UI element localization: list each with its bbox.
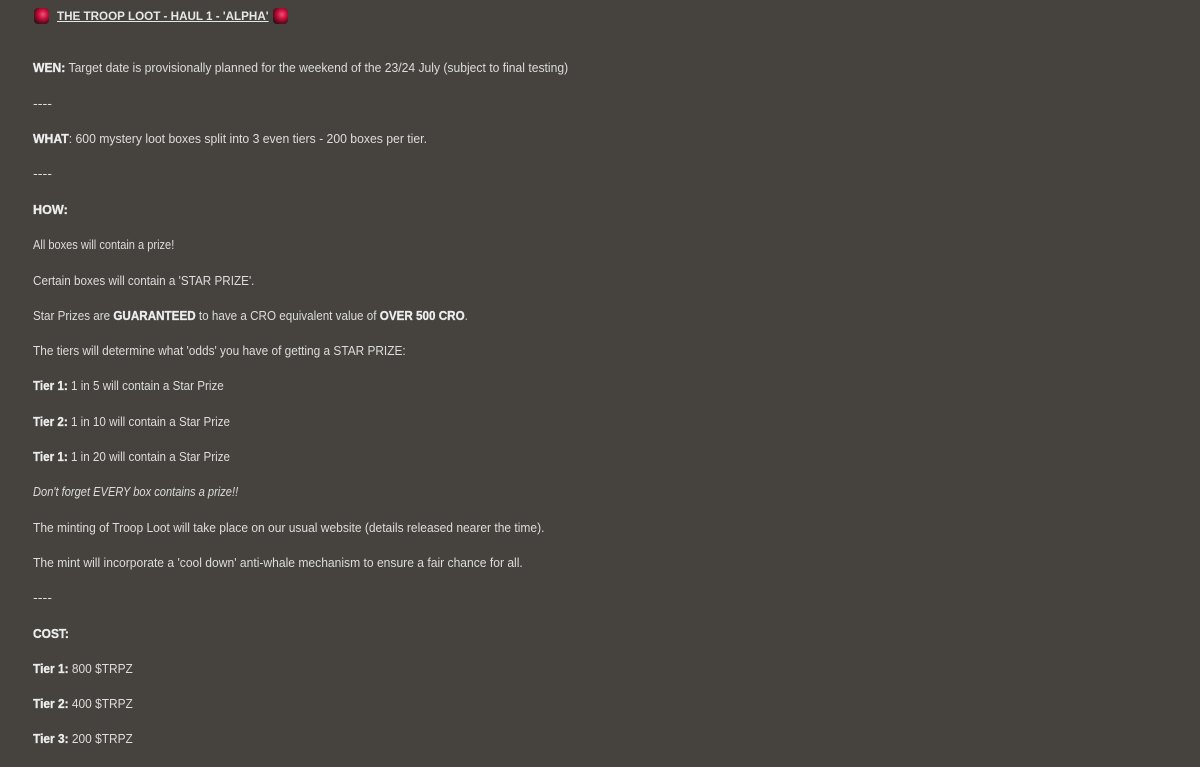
text: tier 2 cost: Tier 2: 400 $TRPZ <box>33 696 133 711</box>
text: cool down: The mint will incorporate a 'cool down' anti-whale mechanism to ensure a fair chance for all. <box>33 555 523 570</box>
title: THE TROOP LOOT - HAUL 1 - 'ALPHA' <box>57 9 269 23</box>
text: tiers odds: The tiers will determine what 'odds' you have of getting a STAR PRIZE: <box>33 343 406 358</box>
text: reminder: Don't forget EVERY box contains a prize!! <box>33 484 238 499</box>
text: tier 3 odds: Tier 1: 1 in 20 will contain a Star Prize <box>33 449 230 464</box>
text: certain boxes: Certain boxes will contain a 'STAR PRIZE'. <box>33 273 254 288</box>
text: tier 2 odds: Tier 2: 1 in 10 will contain a Star Prize <box>33 414 230 429</box>
text: star prizes: Star Prizes are GUARANTEED to have a CRO equivalent value of OVER 500 CRO. <box>33 308 468 323</box>
text: minting: The minting of Troop Loot will take place on our usual website (details released nearer the time). <box>33 520 544 535</box>
heading: cost: COST: <box>33 626 69 641</box>
icon: red gem left <box>34 8 49 24</box>
divider text: ---- <box>33 166 52 181</box>
text: tier 1 cost: Tier 1: 800 $TRPZ <box>33 661 133 676</box>
divider text: ---- <box>33 96 52 111</box>
text: tier 1 odds: Tier 1: 1 in 5 will contain a Star Prize <box>33 378 224 393</box>
divider text: ---- <box>33 590 52 605</box>
heading: how: HOW: <box>33 202 68 217</box>
text: tier 3 cost: Tier 3: 200 $TRPZ <box>33 731 133 746</box>
text: all boxes: All boxes will contain a prize! <box>33 237 174 252</box>
icon: red gem right <box>273 8 288 24</box>
text: what: WHAT: 600 mystery loot boxes split into 3 even tiers - 200 boxes per tier. <box>33 131 427 146</box>
text: wen: WEN: Target date is provisionally planned for the weekend of the 23/24 July (subject to final testing) <box>33 60 568 75</box>
